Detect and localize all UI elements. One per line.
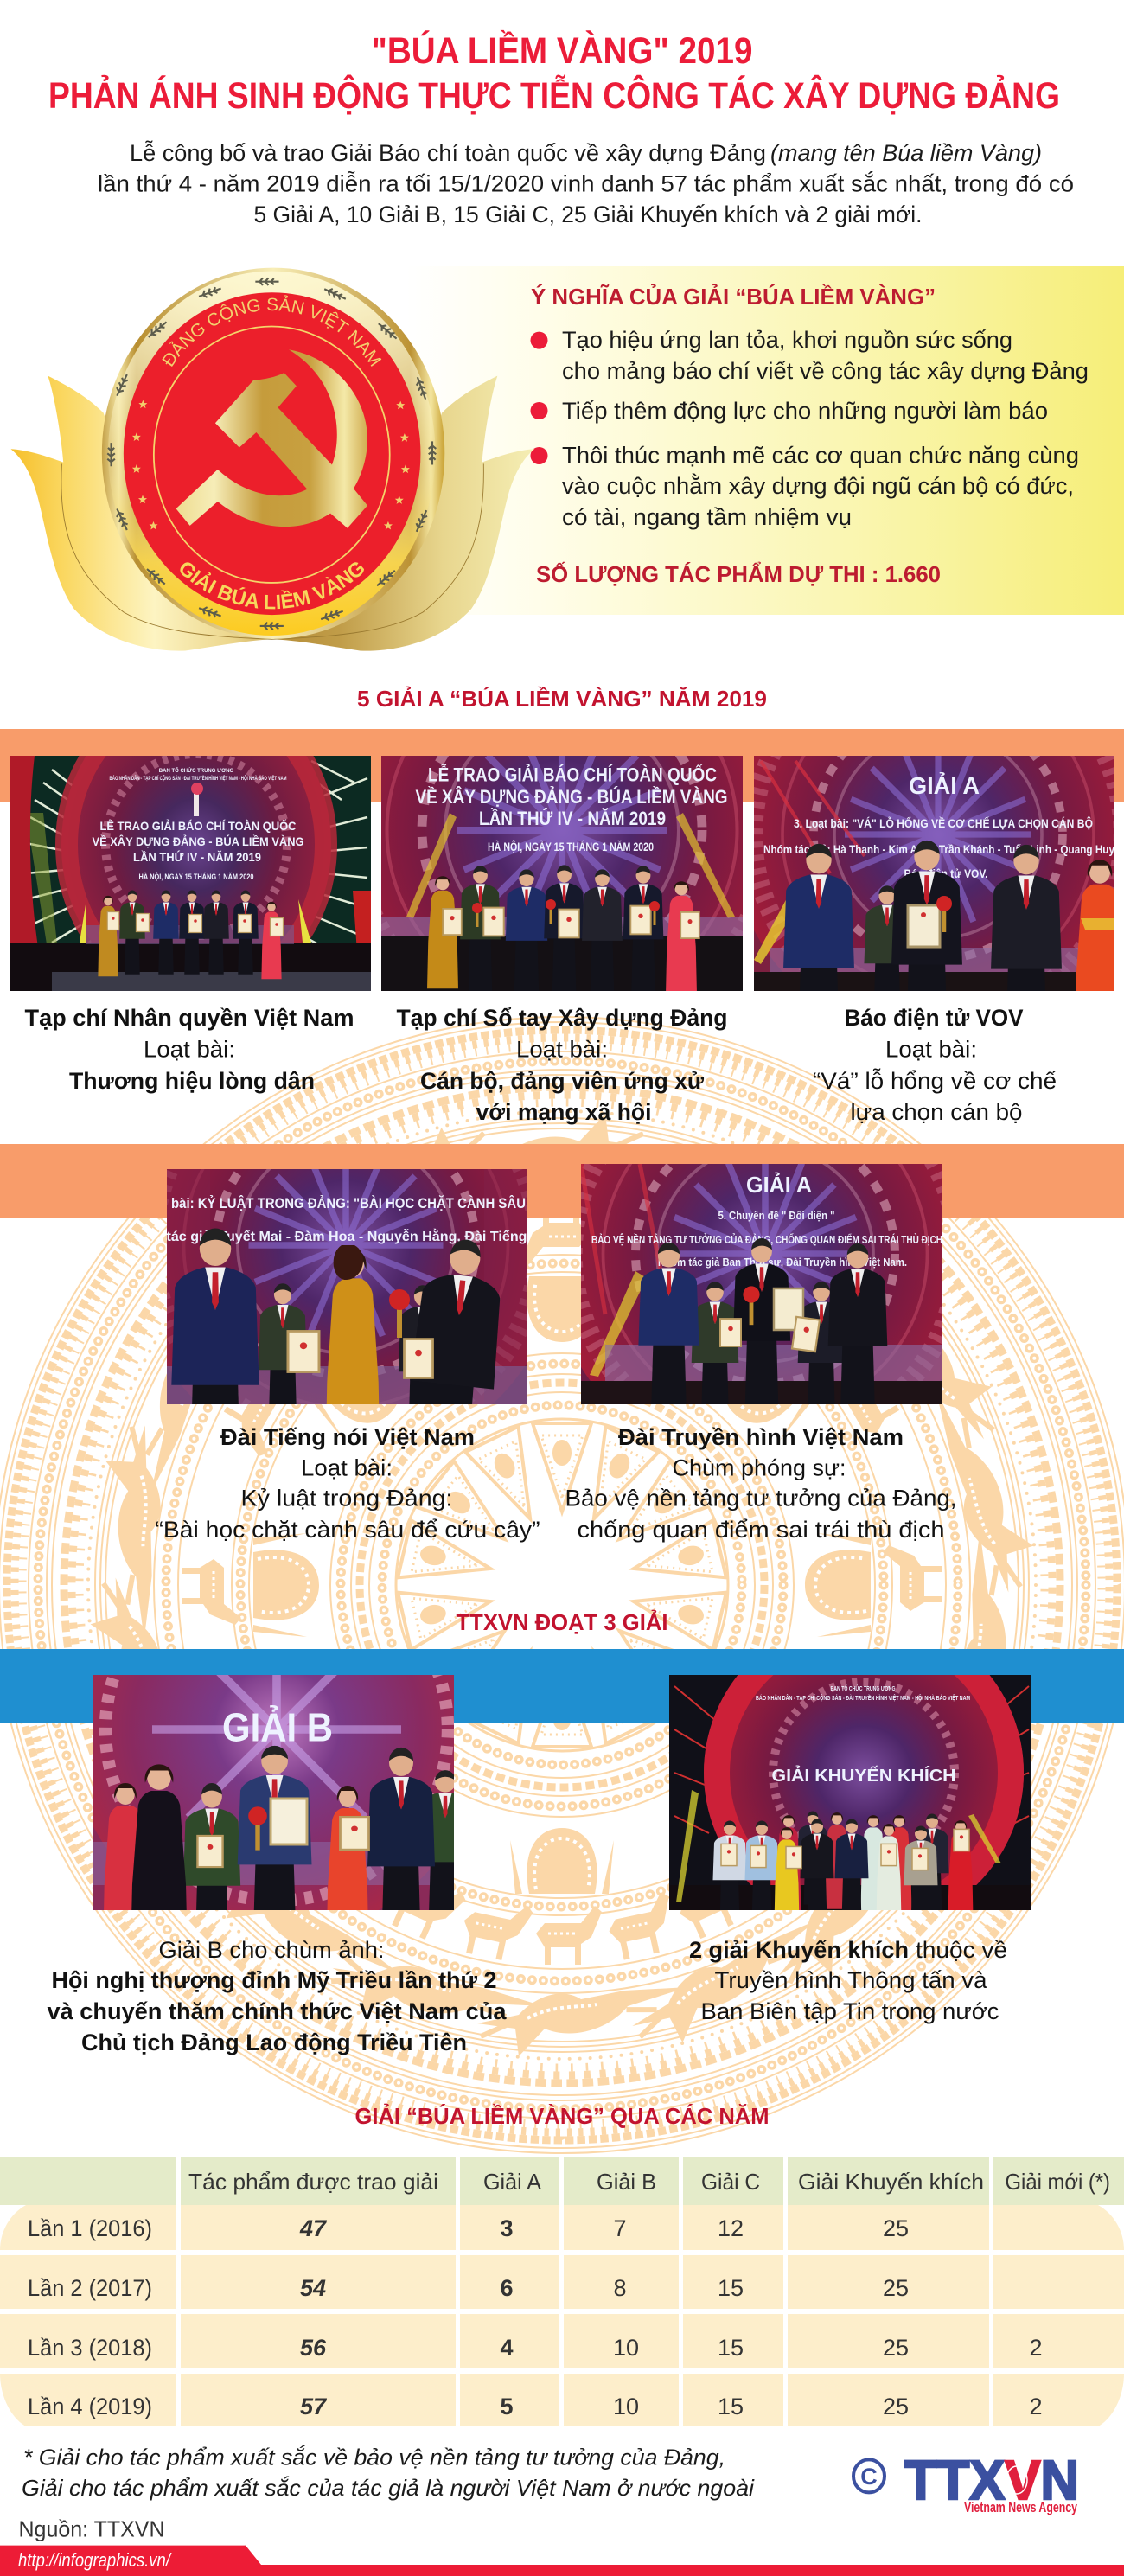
heading: TTXVN 3 prizes: TTXVN ĐOẠT 3 GIẢI: [457, 1609, 667, 1635]
footer bar with url: http://infographics.vn/: [18, 2549, 172, 2571]
caption: Giai B: Chủ tịch Đảng Lao động Triều Tiên: [81, 2029, 467, 2055]
caption: Dai Tieng noi: Đài Tiếng nói Việt Nam: [220, 1424, 475, 1450]
row: 2016: 25: [883, 2215, 909, 2241]
bullet 3: có tài, ngang tầm nhiệm vụ: [562, 504, 852, 530]
captions: first row of A prizes: [24, 1005, 1057, 1125]
row: 2016: 12: [718, 2215, 744, 2241]
caption: Dai Tieng noi: Kỷ luật trong Đảng:: [240, 1486, 453, 1512]
table header row: Giải Khuyến khích: [798, 2169, 984, 2195]
photo: Giai Khuyen khich group: GIẢI KHUYẾN KHÍCH: [771, 1766, 956, 1786]
intro paragraph: (mang tên Búa liềm Vàng): [770, 140, 1042, 166]
source: Nguồn: TTXVN: [19, 2516, 164, 2542]
caption: So tay Xay dung Dang: Loạt bài:: [516, 1036, 608, 1062]
bullet 1: cho mảng báo chí viết về công tác xây dựng Đảng: [562, 358, 1089, 384]
caption: VOV: Báo điện tử VOV: [844, 1005, 1024, 1031]
caption: VOV: lựa chọn cán bộ: [851, 1099, 1022, 1125]
intro paragraph: [98, 139, 1074, 227]
row: 2017: 8: [613, 2275, 627, 2301]
caption: VOV: Loạt bài:: [885, 1036, 977, 1062]
row: 2017: 6: [500, 2275, 514, 2301]
caption: Giai B: Giải B cho chùm ảnh:: [159, 1937, 384, 1963]
caption: Dai Tieng noi: [156, 1424, 540, 1543]
table header row: Giải C: [701, 2169, 760, 2195]
caption: Nhan quyen: Loạt bài:: [144, 1036, 235, 1062]
intro paragraph: Lễ công bố và trao Giải Báo chí toàn quốc về xây dựng Đảng: [130, 139, 766, 166]
photo: group on stage, Nhan quyen: BÁO NHÂN DÂN - TẠP CHÍ CỘNG SẢN - ĐÀI TRUYỀN HÌNH VIỆT NAM - HỘI NHÀ BÁO VIỆT NAM: [109, 775, 287, 782]
photo: Giai Khuyen khich group: BÁO NHÂN DÂN - TẠP CHÍ CỘNG SẢN - ĐÀI TRUYỀN HÌNH VIỆT NAM - HỘI NHÀ BÁO VIỆT NAM: [756, 1693, 970, 1702]
photo: group close-up, So tay Xay dung Dang: HÀ NỘI, NGÀY 15 THÁNG 1 NĂM 2020: [488, 839, 654, 853]
photo: Bao dien tu VOV award: GIẢI A: [909, 771, 980, 799]
photo: Dai Truyen hinh Viet Nam award: Nhóm tác giả Ban Thời sự, Đài Truyền hình Việt Nam.: [658, 1256, 907, 1269]
photo: Dai Truyen hinh Viet Nam award: [581, 1164, 942, 1404]
photo: group on stage, Nhan quyen: BAN TỔ CHỨC TRUNG ƯƠNG: [159, 768, 234, 774]
bullet 2: Tiếp thêm động lực cho những người làm báo: [562, 398, 1048, 424]
caption: Dai Truyen hinh: chống quan điểm sai trái thù địch: [578, 1517, 944, 1543]
caption: Dai Truyen hinh: Chùm phóng sự:: [673, 1454, 846, 1480]
photo: Dai Truyen hinh Viet Nam award: BẢO VỆ NỀN TẢNG TƯ TƯỞNG CỦA ĐẢNG, CHỐNG QUAN ĐIỂM SAI TRÁI THÙ ĐỊCH: [591, 1233, 942, 1246]
captions: second row of A prizes: [156, 1424, 956, 1543]
row: 2019: 10: [613, 2394, 639, 2419]
caption: So tay Xay dung Dang: Tạp chí Sổ tay Xây dựng Đảng: [396, 1005, 728, 1031]
heading: 5 A prizes: 5 GIẢI A “BÚA LIỀM VÀNG” NĂM 2019: [357, 686, 767, 712]
photo: Dai Tieng noi Viet Nam award: [167, 1169, 527, 1404]
row: 2019: 2: [1029, 2394, 1043, 2419]
caption: Dai Truyen hinh: Đài Truyền hình Việt Nam: [618, 1424, 904, 1450]
table header row: Giải mới (*): [1005, 2169, 1110, 2195]
footnote: [22, 2444, 755, 2501]
caption: Giai B: [47, 1937, 507, 2055]
row: 2018: 2: [1029, 2335, 1043, 2361]
footnote: Giải cho tác phẩm xuất sắc của tác giả là người Việt Nam ở nước ngoài: [22, 2475, 755, 2501]
intro paragraph: 5 Giải A, 10 Giải B, 15 Giải C, 25 Giải Khuyến khích và 2 giải mới.: [254, 201, 922, 227]
caption: Nhan quyen: [24, 1005, 354, 1094]
caption: Giai Khuyen khich: 2 giải Khuyến khích: [689, 1937, 909, 1963]
bullet 3: vào cuộc nhằm xây dựng đội ngũ cán bộ có đức,: [562, 472, 1074, 499]
row: 2019: Lần 4 (2019): [28, 2394, 152, 2419]
row: 2019: 5: [500, 2394, 514, 2419]
table header row: Tác phẩm được trao giải: [188, 2169, 438, 2195]
row: 2018: [0, 2314, 1124, 2368]
orange band 1: [0, 729, 1124, 802]
row: 2016: 7: [613, 2215, 627, 2241]
caption: Dai Truyen hinh: Bảo vệ nền tảng tư tưởng của Đảng,: [565, 1486, 956, 1512]
caption: Giai Khuyen khich: Truyền hình Thông tấn và: [714, 1967, 987, 1993]
row: 2018: 15: [718, 2335, 744, 2361]
row: 2016: 3: [500, 2215, 514, 2241]
background: Dong Son bronze drum watermark: [0, 1017, 1124, 2153]
row: 2017: 54: [300, 2275, 326, 2301]
row: 2017: [0, 2255, 1124, 2309]
row: 2016: [0, 2205, 1124, 2250]
caption: So tay Xay dung Dang: [396, 1005, 728, 1125]
panel: meaning of the award: [406, 266, 1124, 615]
photo: group close-up, So tay Xay dung Dang: LẦN THỨ IV - NĂM 2019: [479, 808, 666, 829]
photo: group close-up, So tay Xay dung Dang: VỀ XÂY DỰNG ĐẢNG - BÚA LIỀM VÀNG: [415, 786, 728, 808]
logo: TTXVN: TTXVN: [904, 2449, 1079, 2511]
row: 2017: Lần 2 (2017): [28, 2275, 152, 2301]
row: 2016: Lần 1 (2016): [28, 2215, 152, 2241]
photo: group close-up, So tay Xay dung Dang: LỄ TRAO GIẢI BÁO CHÍ TOÀN QUỐC: [428, 763, 717, 785]
caption: So tay Xay dung Dang: với mạng xã hội: [476, 1099, 652, 1125]
caption: So tay Xay dung Dang: Cán bộ, đảng viên ứng xử: [420, 1068, 704, 1094]
entries count: SỐ LƯỢNG TÁC PHẨM DỰ THI : 1.660: [536, 561, 941, 587]
row: 2018: 10: [613, 2335, 639, 2361]
photo: Giai B award: GIẢI B: [222, 1705, 333, 1750]
panel heading: Ý NGHĨA CỦA GIẢI “BÚA LIỀM VÀNG”: [531, 283, 936, 310]
photo: Bao dien tu VOV award: [754, 756, 1114, 991]
blue band: [0, 1649, 1124, 1723]
photo: Giai Khuyen khich group: [669, 1675, 1031, 1910]
bullet 1: [531, 327, 1089, 384]
row: 2018: 4: [500, 2335, 514, 2361]
caption: VOV: [813, 1005, 1057, 1125]
photo: group on stage, Nhan quyen: VỀ XÂY DỰNG ĐẢNG - BÚA LIỀM VÀNG: [92, 834, 304, 848]
caption: Dai Tieng noi: “Bài học chặt cành sâu để cứu cây”: [156, 1517, 540, 1543]
bullet 1: Tạo hiệu ứng lan tỏa, khơi nguồn sức sống: [562, 327, 1012, 353]
row: 2019: 15: [718, 2394, 744, 2419]
row: 2018: Lần 3 (2018): [28, 2335, 152, 2361]
photo: group on stage, Nhan quyen: HÀ NỘI, NGÀY 15 THÁNG 1 NĂM 2020: [138, 872, 254, 881]
photo: Giai Khuyen khich group: BAN TỔ CHỨC TRUNG ƯƠNG: [830, 1684, 896, 1692]
photo: Dai Tieng noi Viet Nam award: tác giả: Tuyết Mai - Đàm Hoa - Nguyễn Hằng, Đài Tiếng: [166, 1228, 527, 1244]
table header row: [0, 2157, 1124, 2205]
photo: group close-up, So tay Xay dung Dang: [381, 756, 743, 991]
caption: Giai Khuyen khich: [689, 1937, 1007, 2024]
caption: Dai Truyen hinh: [565, 1424, 956, 1543]
caption: Giai B: Hội nghị thượng đỉnh Mỹ Triều lần thứ 2: [52, 1967, 496, 1993]
row: 2018: 56: [300, 2335, 327, 2361]
row: 2019: [0, 2374, 1124, 2426]
photo: Dai Truyen hinh Viet Nam award: 5. Chuyên đề " Đối diện ": [718, 1209, 835, 1222]
row: 2017: 15: [718, 2275, 744, 2301]
footnote: * Giải cho tác phẩm xuất sắc về bảo vệ nền tảng tư tưởng của Đảng,: [23, 2444, 725, 2470]
table header row: Giải B: [597, 2169, 656, 2195]
caption: Giai B: và chuyến thăm chính thức Việt Nam của: [47, 1998, 507, 2024]
photo: group on stage, Nhan quyen: LẦN THỨ IV - NĂM 2019: [133, 849, 261, 864]
title: "BÚA LIỀM VÀNG" 2019: [372, 29, 752, 72]
heading: prize over the years: GIẢI “BÚA LIỀM VÀNG” QUA CÁC NĂM: [354, 2103, 770, 2129]
footer bar with url: [0, 2546, 1124, 2576]
photo: Giai B award: [93, 1675, 454, 1910]
row: 2019: 57: [300, 2394, 328, 2419]
icon: golden hammer and sickle medal on lotus: GIẢI BÚA LIỀM VÀNG: [180, 562, 364, 609]
bullet 3: Thôi thúc mạnh mẽ các cơ quan chức năng cùng: [562, 443, 1079, 469]
table: prizes by year: [0, 2157, 1124, 2426]
caption: Giai Khuyen khich: Ban Biên tập Tin trong nước: [700, 1998, 999, 2024]
row: 2018: 25: [883, 2335, 909, 2361]
caption: VOV: “Vá” lỗ hổng về cơ chế: [813, 1067, 1057, 1094]
photo: Dai Tieng noi Viet Nam award: bài: KỶ LUẬT TRONG ĐẢNG: "BÀI HỌC CHẶT CÀNH SÂU: [171, 1195, 526, 1211]
title: [48, 29, 1060, 117]
intro paragraph: lần thứ 4 - năm 2019 diễn ra tối 15/1/2020 vinh danh 57 tác phẩm xuất sắc nhất, trong đó có: [98, 169, 1074, 197]
photo: Bao dien tu VOV award: Báo điện tử VOV.: [904, 866, 987, 880]
logo: TTXVN: C: [860, 2464, 878, 2490]
icon: golden hammer and sickle medal on lotus: [10, 268, 534, 651]
icon: golden hammer and sickle medal on lotus: ĐẢNG CỘNG SẢN VIỆT NAM: [162, 295, 382, 367]
caption: Giai Khuyen khich: thuộc về: [916, 1937, 1007, 1963]
row: 2016: 47: [299, 2215, 328, 2241]
photo: Dai Truyen hinh Viet Nam award: GIẢI A: [746, 1172, 812, 1198]
logo: TTXVN: Vietnam News Agency: [964, 2499, 1077, 2515]
bullet 3: [531, 443, 1079, 530]
caption: Nhan quyen: Tạp chí Nhân quyền Việt Nam: [24, 1005, 354, 1031]
row: 2017: 25: [883, 2275, 909, 2301]
orange band 2: [0, 1144, 1124, 1218]
caption: Dai Tieng noi: Loạt bài:: [301, 1454, 393, 1480]
table header row: Giải A: [483, 2169, 542, 2195]
caption: Nhan quyen: Thương hiệu lòng dân: [69, 1068, 315, 1094]
photo: group on stage, Nhan quyen: LỄ TRAO GIẢI BÁO CHÍ TOÀN QUỐC: [100, 818, 296, 833]
photo: group on stage, Nhan quyen: [10, 756, 371, 991]
row: 2019: 25: [883, 2394, 909, 2419]
